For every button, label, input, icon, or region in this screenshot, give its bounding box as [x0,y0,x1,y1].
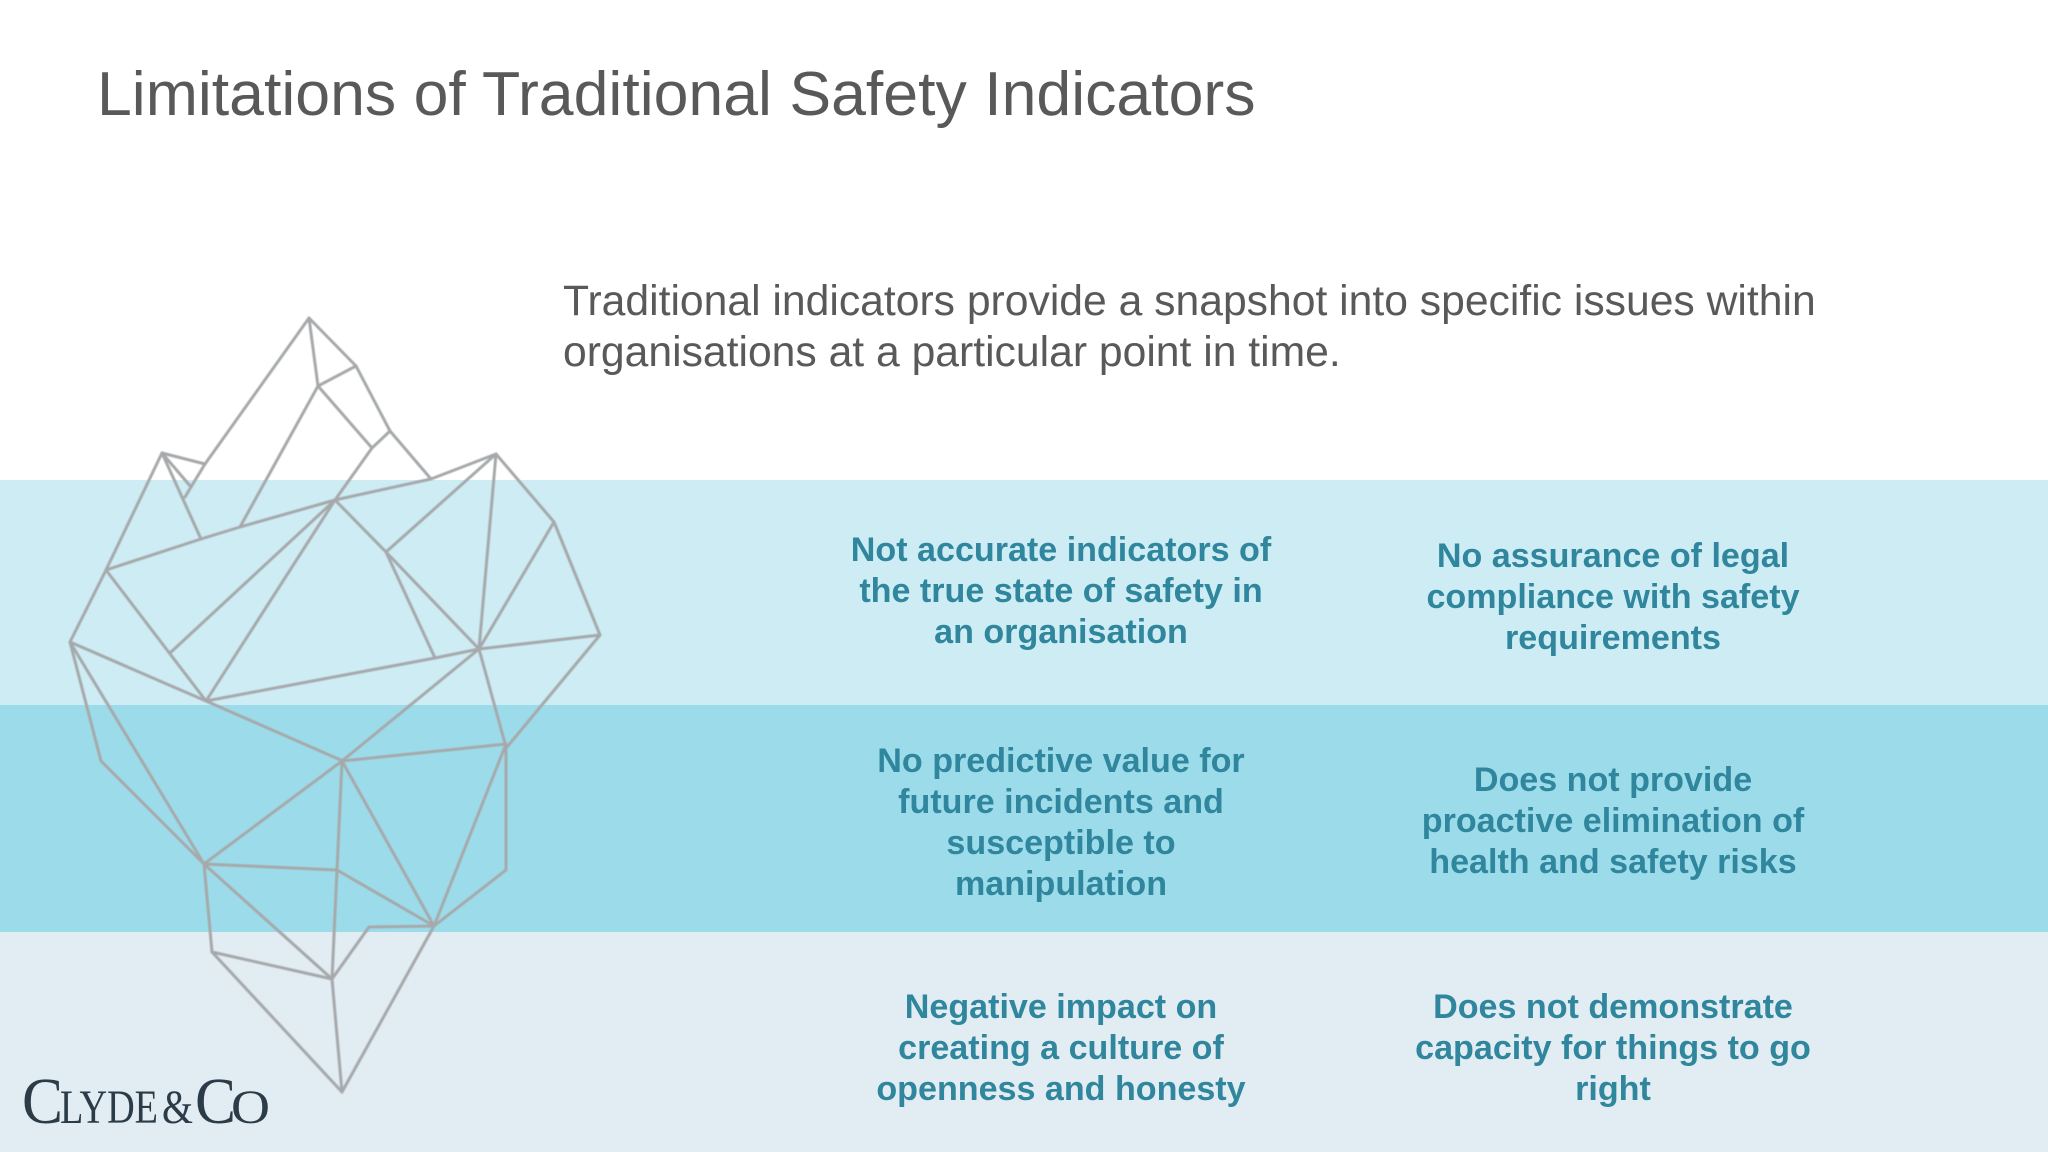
title: Limitations of Traditional Safety Indicators [97,59,1256,129]
intro text: organisations at a particular point in time. [563,328,1341,376]
text: no predictive value: No predictive value for [877,742,1245,780]
logo: Clyde & Co [22,1070,270,1138]
text: no proactive elimination: health and safety risks [1429,843,1797,881]
text: no assurance of legal compliance: compliance with safety [1426,578,1800,616]
text: not accurate indicators: the true state of safety in [859,572,1263,610]
logo: Clyde & Co: O [231,1081,270,1134]
band: middle water layer [0,705,2048,932]
text: no predictive value: future incidents and [898,783,1224,821]
text: capacity for things to go right [1415,988,1811,1108]
text: capacity for things to go right: Does not demonstrate [1433,988,1793,1026]
text: no assurance of legal compliance: No assurance of legal [1437,537,1789,575]
text: not accurate indicators: Not accurate indicators of [851,531,1271,569]
text: no proactive elimination [1422,761,1804,881]
text: not accurate indicators: an organisation [934,613,1188,651]
text: no predictive value: manipulation [955,865,1167,903]
band: bottom water layer [0,932,2048,1152]
text: negative impact on culture: Negative impact on [905,988,1217,1026]
text: no assurance of legal compliance [1426,537,1800,657]
band: top water layer [0,480,2048,705]
text: no predictive value [877,742,1245,903]
logo: Clyde & Co: LYDE [60,1081,158,1134]
text: no proactive elimination: Does not provide [1474,761,1752,799]
text: no assurance of legal compliance: requirements [1505,619,1721,657]
text: negative impact on culture: creating a culture of [898,1029,1224,1067]
text: no predictive value: susceptible to [946,824,1176,862]
intro text [563,277,1816,376]
text: negative impact on culture: openness and honesty [876,1070,1246,1108]
text: not accurate indicators [851,531,1272,651]
text: capacity for things to go right: capacity for things to go [1415,1029,1811,1067]
text: no proactive elimination: proactive elimination of [1422,802,1804,840]
text: capacity for things to go right: right [1575,1070,1651,1108]
intro text: Traditional indicators provide a snapshot into specific issues within [563,277,1816,325]
text: negative impact on culture [876,988,1246,1108]
logo: Clyde & Co: & [162,1081,193,1134]
